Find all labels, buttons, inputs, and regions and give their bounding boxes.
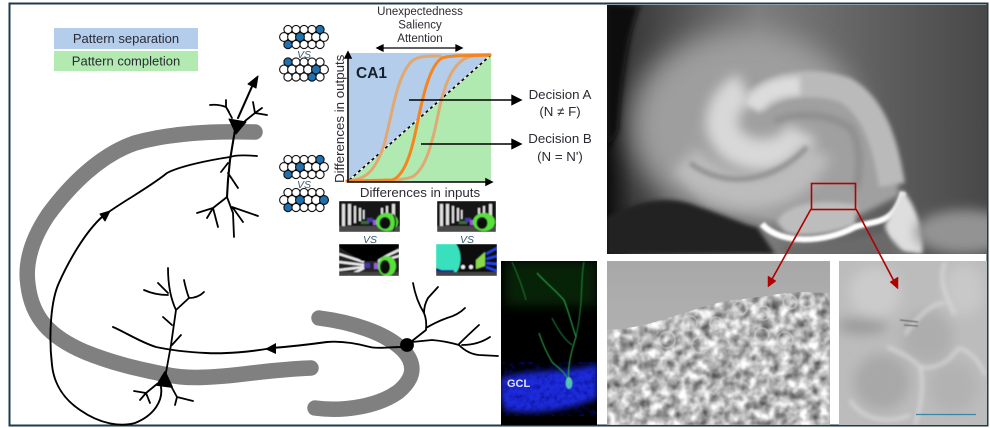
legend: pattern completion bbox=[54, 51, 198, 71]
thumbnail: corridor A repeat bbox=[437, 201, 496, 232]
arrow: decision A bbox=[409, 96, 521, 104]
arrow: to lower left micrograph bbox=[768, 209, 811, 287]
background green haze bbox=[505, 261, 597, 306]
arrow: decision B bbox=[421, 140, 521, 148]
dark upper-left corner bbox=[607, 5, 640, 150]
bright spiral head bbox=[752, 86, 800, 108]
label: GCL: GCL bbox=[507, 378, 530, 390]
label: VS: VS bbox=[363, 234, 377, 246]
legend: pattern completion: Pattern completion bbox=[72, 54, 180, 68]
legend: pattern separation: Pattern separation bbox=[73, 31, 179, 46]
inner hilus shading bbox=[775, 115, 859, 190]
arrowhead: axon direction bbox=[100, 211, 110, 221]
label: decision A: Decision A bbox=[529, 87, 592, 102]
label: decision B bbox=[528, 131, 592, 164]
label: VS: VS bbox=[460, 234, 474, 246]
legend bbox=[54, 28, 198, 71]
arrow: shift of transfer curve bbox=[377, 45, 462, 51]
shaded base below the rim bbox=[780, 232, 905, 254]
dentate cell layer bbox=[690, 147, 807, 179]
cell bodies bbox=[836, 264, 984, 413]
heading: modulators: Attention bbox=[397, 33, 443, 45]
dark lower-left void bbox=[607, 200, 775, 254]
lower right glow bbox=[915, 210, 990, 254]
lower blade bbox=[685, 150, 815, 191]
GFP-labelled neurons bbox=[512, 262, 584, 383]
hilus and CA tissue bbox=[711, 106, 902, 222]
ensemble pair: pattern separation: VS bbox=[297, 49, 311, 61]
bright right tissue bbox=[885, 190, 923, 254]
cell outlines bbox=[659, 293, 814, 353]
lobe at the base bbox=[777, 202, 857, 235]
CA1 input-output chart bbox=[332, 6, 592, 200]
arrowhead: mossy fiber direction bbox=[265, 343, 276, 354]
labelled soma bbox=[566, 377, 572, 389]
thumbnail: corridor N prime bbox=[339, 244, 399, 276]
dentate spiral bbox=[722, 88, 802, 155]
region of interest box bbox=[812, 184, 856, 210]
label: CA1: CA1 bbox=[356, 65, 387, 82]
neuron: CA3 pyramidal cell bbox=[134, 268, 204, 405]
textured cell layer bbox=[607, 285, 830, 425]
x axis label: Differences in inputs bbox=[360, 185, 480, 200]
arrowhead: CA1 output bbox=[248, 76, 258, 88]
label: decision A bbox=[529, 87, 592, 119]
axes bbox=[345, 52, 492, 185]
label: decision B: (N = N') bbox=[537, 149, 583, 164]
curves: input-output transfer functions bbox=[347, 55, 490, 181]
region: pattern separation bbox=[347, 53, 491, 182]
axon: Schaffer collateral from CA3 to CA1 bbox=[50, 216, 161, 425]
arrow: to lower right micrograph bbox=[856, 209, 898, 289]
ensemble pair: pattern completion: VS bbox=[297, 179, 311, 191]
label: decision B: Decision B bbox=[528, 131, 592, 146]
virtual environment thumbnails bbox=[339, 201, 497, 276]
zoom indicator bbox=[768, 184, 898, 289]
granule cell layer bbox=[501, 362, 597, 416]
soma: CA1 cell bbox=[229, 119, 246, 134]
ensemble pair: pattern separation bbox=[280, 25, 328, 81]
gray band: dentate gyrus bbox=[315, 318, 412, 409]
axon terminal crossing CA1 dendrites bbox=[103, 155, 257, 216]
slice body glow bbox=[630, 30, 860, 220]
thumbnail: novel corridor bbox=[436, 244, 497, 276]
label: decision A: (N ≠ F) bbox=[539, 104, 581, 119]
heading: modulators bbox=[377, 6, 463, 45]
axon: mossy fiber bbox=[113, 327, 402, 353]
thumbnail: corridor A bbox=[339, 201, 400, 232]
recording pipette tip bbox=[900, 320, 918, 326]
region: pattern completion bbox=[347, 55, 491, 182]
neuron: CA1 pyramidal cell bbox=[100, 76, 267, 237]
gray band: CA1 and CA3 pyramidal layer bbox=[27, 132, 311, 378]
ensemble pairs bbox=[280, 25, 328, 212]
scale bar bbox=[916, 414, 976, 416]
diagonal identity line bbox=[347, 55, 491, 182]
y axis label: Differences in outputs bbox=[332, 54, 347, 183]
bright bottom rim bbox=[762, 192, 903, 239]
confocal micrograph bbox=[501, 261, 597, 425]
lower right micrograph bbox=[836, 261, 987, 425]
legend: pattern separation bbox=[54, 28, 198, 49]
CA arc bbox=[755, 84, 892, 185]
cell membranes bbox=[850, 262, 985, 425]
lower left micrograph bbox=[607, 261, 830, 425]
neuron: dentate granule cell bbox=[401, 283, 498, 356]
heading: modulators: Unexpectedness bbox=[377, 6, 463, 18]
hippocampal circuit diagram bbox=[27, 76, 498, 425]
ensemble pair: pattern completion bbox=[280, 155, 328, 212]
heading: modulators: Saliency bbox=[398, 20, 442, 32]
hippocampal slice photograph bbox=[607, 5, 990, 254]
